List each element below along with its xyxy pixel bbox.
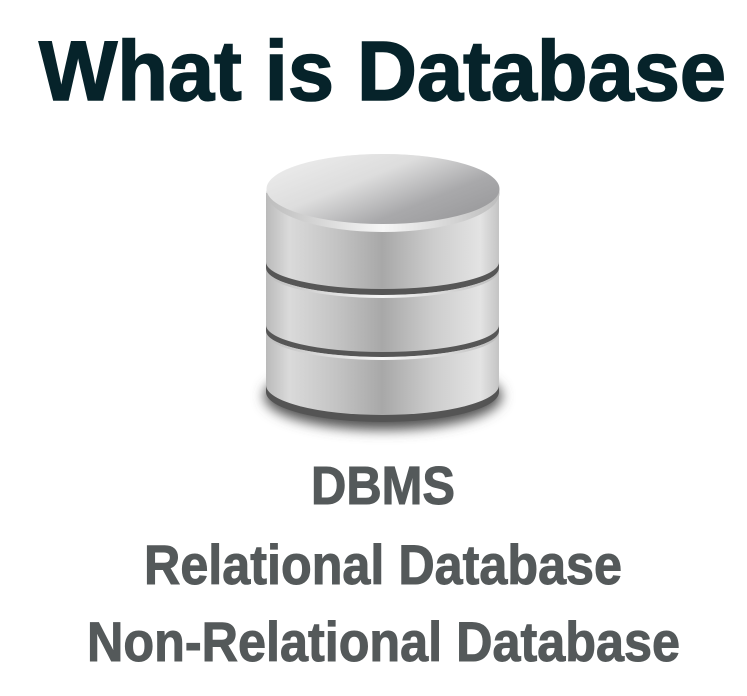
icon: database cylinder — [264, 154, 502, 430]
label: Relational Database: Relational Database — [144, 533, 622, 596]
label: DBMS: DBMS — [311, 456, 455, 516]
label: Non-Relational Database: Non-Relational Database — [87, 610, 680, 673]
top rim — [266, 154, 500, 232]
cylinder body — [266, 193, 499, 415]
cylinder base edge — [266, 380, 499, 422]
top face — [266, 154, 500, 224]
upper groove — [266, 262, 499, 298]
cylinder shadow — [264, 362, 502, 430]
title: What is Database — [39, 24, 726, 118]
lower groove — [266, 325, 499, 360]
